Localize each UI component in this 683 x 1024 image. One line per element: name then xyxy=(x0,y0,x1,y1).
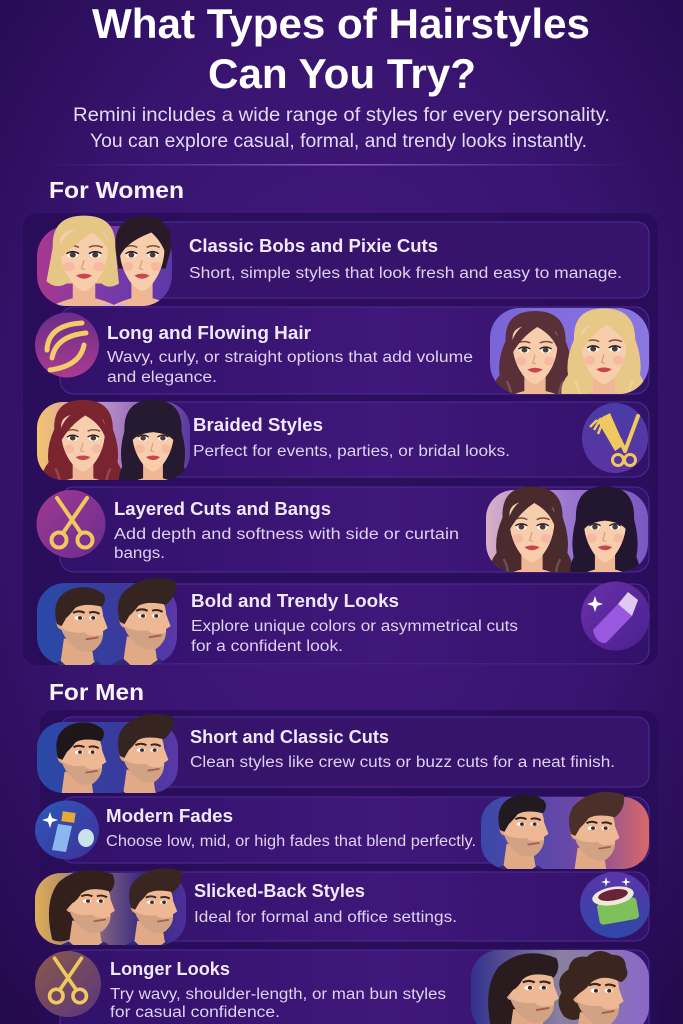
text: short cuts: Short and Classic Cuts xyxy=(190,727,389,747)
text: layered cuts: Add depth and softness with side or curtain xyxy=(114,526,459,543)
text: longer looks: Try wavy, shoulder-length, or man bun styles xyxy=(110,986,446,1003)
row: long and flowing hair xyxy=(35,306,650,394)
title: Can You Try? xyxy=(208,50,476,97)
icon: pump bottle xyxy=(35,800,99,860)
text: classic bobs: Classic Bobs and Pixie Cuts xyxy=(189,236,438,256)
intro text: You can explore casual, formal, and trendy looks instantly. xyxy=(90,131,587,152)
row: modern fades xyxy=(35,792,650,869)
portrait: braids xyxy=(37,400,190,480)
text: long hair xyxy=(107,323,473,386)
text: bold looks: Explore unique colors or asymmetrical cuts xyxy=(191,618,518,635)
row: braided styles xyxy=(37,400,650,480)
title: What Types of Hairstyles xyxy=(92,0,590,47)
icon: comb and scissors xyxy=(582,403,648,473)
text: classic bobs xyxy=(189,236,622,282)
portrait: short cuts xyxy=(37,714,178,793)
row: longer looks xyxy=(35,950,649,1024)
intro text xyxy=(73,105,610,152)
row: layered cuts and bangs xyxy=(36,486,650,572)
text: classic bobs: Short, simple styles that look fresh and easy to manage. xyxy=(189,265,622,282)
title xyxy=(92,0,590,97)
portrait: longer looks xyxy=(471,950,649,1024)
text: modern fades xyxy=(106,806,476,850)
text: slicked back: Ideal for formal and office settings. xyxy=(194,909,457,926)
text: long hair: Long and Flowing Hair xyxy=(107,323,311,343)
icon: scissors xyxy=(36,490,106,558)
icon: scissors and hand xyxy=(35,951,101,1017)
text: slicked back xyxy=(194,881,457,926)
text: braided styles xyxy=(193,415,510,460)
text: braided styles: Perfect for events, parties, or bridal looks. xyxy=(193,443,510,460)
text: short cuts: Clean styles like crew cuts or buzz cuts for a neat finish. xyxy=(190,754,615,771)
text: long hair: and elegance. xyxy=(107,369,217,386)
text: braided styles: Braided Styles xyxy=(193,415,323,435)
text: modern fades: Choose low, mid, or high fades that blend perfectly. xyxy=(106,833,476,850)
text: layered cuts xyxy=(114,499,459,562)
portrait: fades xyxy=(481,792,649,869)
text: layered cuts: Layered Cuts and Bangs xyxy=(114,499,331,519)
text: layered cuts: bangs. xyxy=(114,545,165,562)
text: short cuts xyxy=(190,727,615,771)
portrait: long hair xyxy=(490,308,649,394)
row: classic bobs and pixie cuts xyxy=(37,216,650,306)
heading: for men: For Men xyxy=(49,679,144,705)
portrait: bob and pixie xyxy=(37,216,172,306)
panel: for women xyxy=(23,213,658,685)
text: longer looks: for casual confidence. xyxy=(110,1004,280,1021)
icon: styling jar xyxy=(580,872,650,938)
row: bold and trendy looks xyxy=(37,578,650,665)
portrait: slicked back xyxy=(35,868,186,945)
text: modern fades: Modern Fades xyxy=(106,806,233,826)
text: longer looks xyxy=(110,959,446,1021)
row: short and classic cuts xyxy=(37,714,650,793)
intro text: Remini includes a wide range of styles for every personality. xyxy=(73,105,610,126)
text: bold looks xyxy=(191,591,518,655)
text: bold looks: for a confident look. xyxy=(191,638,343,655)
icon: hair swoosh xyxy=(35,312,99,378)
row: slicked-back styles xyxy=(35,868,650,945)
icon: dye bottle xyxy=(581,582,650,650)
text: bold looks: Bold and Trendy Looks xyxy=(191,591,399,611)
panel: for men xyxy=(32,710,658,1024)
heading: for women: For Women xyxy=(49,177,184,203)
portrait: bold looks xyxy=(37,578,177,665)
text: longer looks: Longer Looks xyxy=(110,959,230,979)
portrait: layered cuts xyxy=(486,486,648,572)
text: long hair: Wavy, curly, or straight options that add volume xyxy=(107,349,473,366)
text: slicked back: Slicked-Back Styles xyxy=(194,881,365,901)
